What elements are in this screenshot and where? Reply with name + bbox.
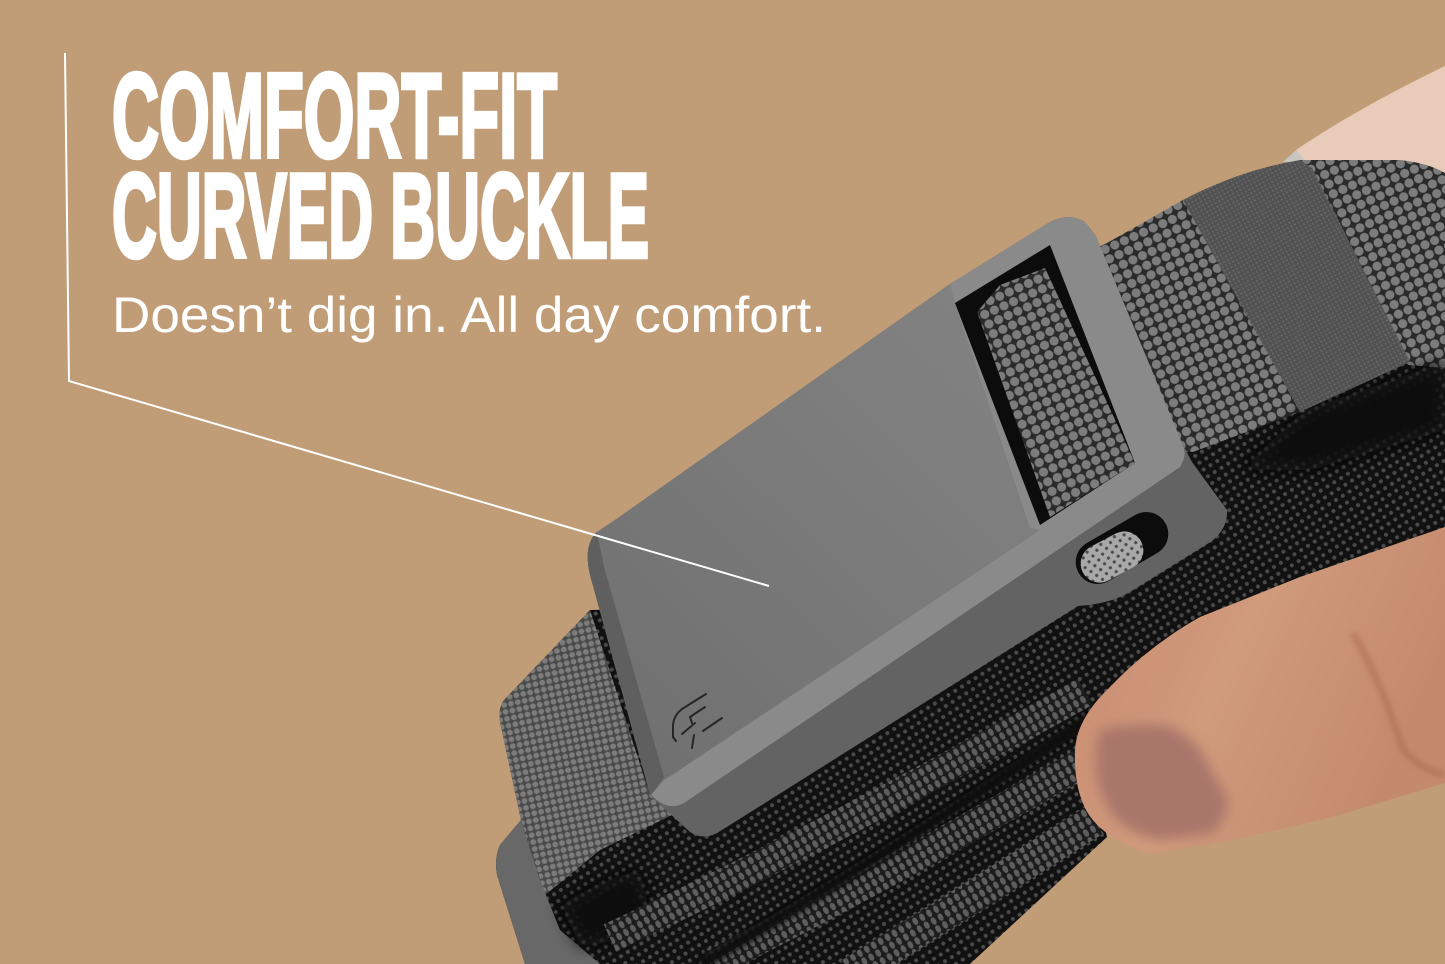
strap shadow (1240, 362, 1445, 470)
thumbnail (1096, 725, 1228, 840)
webbing: lower loop (496, 820, 600, 964)
buckle frame (651, 217, 1185, 806)
slider button (1074, 525, 1150, 589)
band: first fold (610, 692, 1085, 938)
webbing strap right of buckle (1060, 160, 1445, 470)
title: CURVED BUCKLE (112, 149, 649, 283)
webbing: outer loop (500, 610, 672, 895)
buckle plate (588, 225, 1182, 803)
band: second fold (710, 760, 1088, 964)
thumb (1075, 527, 1445, 854)
band: third fold (850, 820, 1095, 964)
lower belt coils (496, 300, 1445, 964)
buckle side wall (588, 217, 1227, 837)
slider hole (1068, 504, 1176, 592)
callout line (65, 53, 769, 586)
black streak (700, 715, 1095, 964)
shadow under loop (560, 870, 650, 946)
upper finger (1283, 66, 1445, 180)
title (112, 49, 649, 283)
knuckle crease (1353, 633, 1445, 775)
icon: brand logo (673, 694, 722, 748)
title: COMFORT-FIT (112, 49, 557, 183)
subtitle: Doesn’t dig in. All day comfort. (112, 287, 826, 343)
window webbing (977, 268, 1135, 517)
window (955, 245, 1135, 525)
left bevel (588, 532, 664, 795)
hand (1075, 527, 1445, 854)
buckle (588, 217, 1227, 837)
keeper band (1183, 160, 1410, 412)
